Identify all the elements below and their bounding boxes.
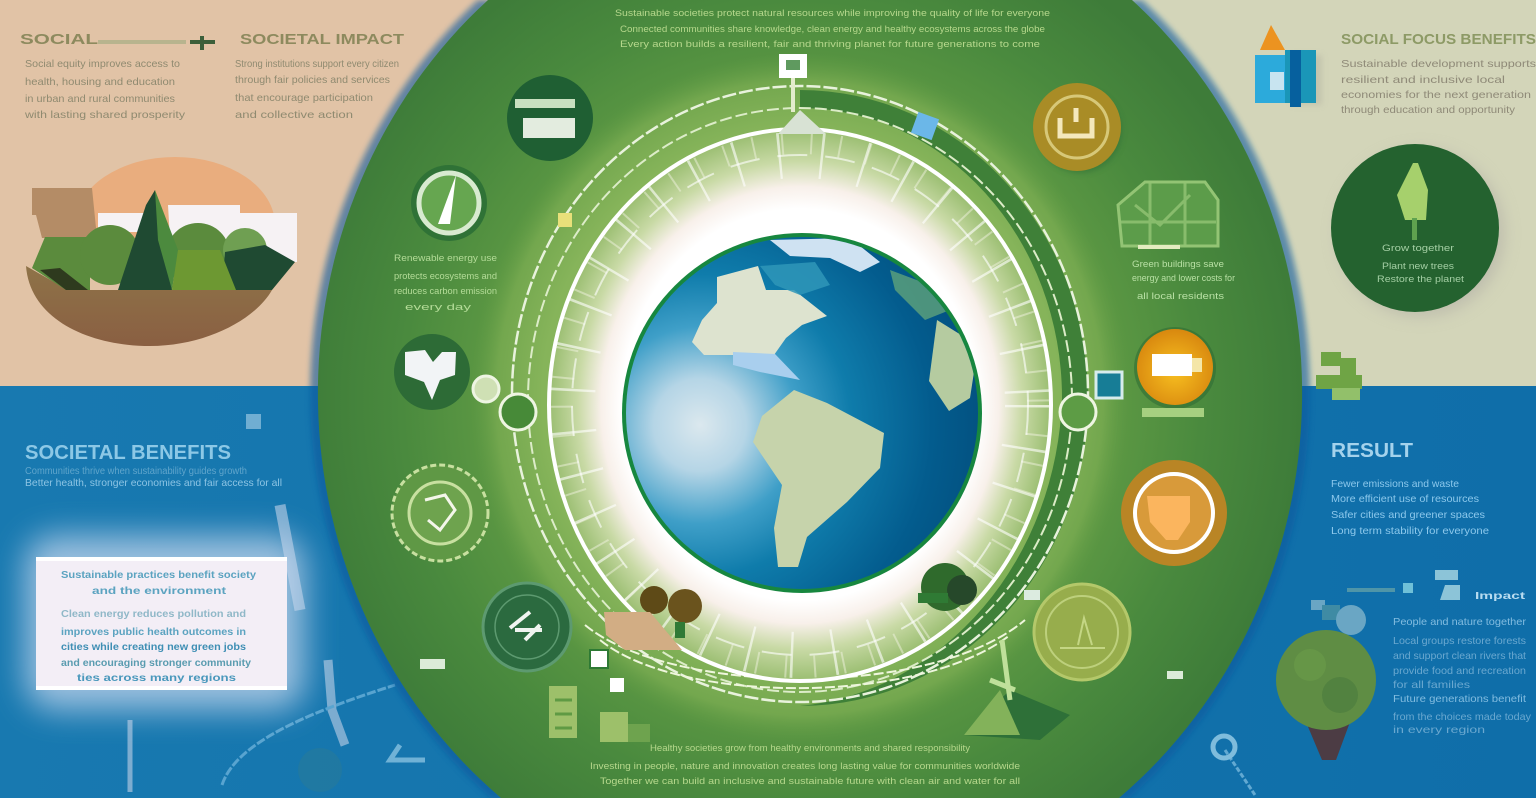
- plant: [1397, 163, 1428, 220]
- icon: recycling badge: [411, 165, 487, 241]
- body text: economies for the next generation: [1341, 89, 1531, 101]
- bottom centre text: Healthy societies grow from healthy environments and shared responsibility: [650, 743, 970, 754]
- icon: olive landscape badge: [1034, 584, 1130, 680]
- body text: health, housing and education: [25, 76, 175, 88]
- outer thin ring: [512, 86, 1088, 702]
- heading: SOCIETAL BENEFITS: [25, 442, 231, 464]
- dark shrubs left: [40, 268, 88, 290]
- arrow: [98, 36, 215, 50]
- body text: and collective action: [235, 109, 353, 121]
- arctic ice: [770, 238, 880, 272]
- body text: [1341, 58, 1536, 116]
- small chart label: Impact: [1475, 591, 1526, 602]
- body text: through fair policies and services: [235, 74, 390, 86]
- body text: with lasting shared prosperity: [24, 109, 186, 121]
- panel: societal benefits left: [25, 414, 282, 489]
- icon: magnifier node: [1213, 736, 1235, 758]
- white clouds: [98, 205, 297, 262]
- dark band: [800, 90, 1088, 706]
- bottom centre text: Together we can build an inclusive and sustainable future with clean air and water for all: [600, 776, 1020, 787]
- body text: [1331, 478, 1489, 537]
- top centre text: Every action builds a resilient, fair and thriving planet for future generations to come: [620, 39, 1040, 50]
- icon: cloud shape above tree: [1311, 600, 1366, 635]
- badge text: Grow together: [1382, 243, 1454, 254]
- card text: Sustainable practices benefit society: [61, 570, 256, 581]
- small marker: [246, 414, 261, 429]
- body text: that encourage participation: [235, 92, 373, 104]
- card text: Clean energy reduces pollution and: [61, 609, 246, 620]
- left text block: upper: every day: [405, 302, 471, 313]
- body text: [24, 58, 186, 121]
- africa: [929, 320, 974, 411]
- band segments: [572, 155, 1028, 655]
- right text block: upper: Green buildings save: [1132, 259, 1224, 270]
- card text: and the environment: [92, 586, 227, 597]
- small chart label: [1347, 570, 1526, 602]
- blue diamond node: [911, 112, 939, 140]
- background: blue panel: [0, 386, 1536, 798]
- right lower text: for all families: [1393, 679, 1470, 691]
- body text: Sustainable development supports: [1341, 58, 1536, 70]
- badge text: [1377, 243, 1464, 285]
- callout card: [25, 535, 305, 710]
- subtitle: Communities thrive when sustainability guides growth: [25, 466, 247, 477]
- card text: and encouraging stronger community: [61, 658, 251, 669]
- icon: outlined globe badge: [392, 465, 488, 561]
- background: peach panel: [0, 0, 800, 388]
- icon: orange cup badge: [1134, 327, 1216, 417]
- right lower text: [1393, 616, 1532, 736]
- icon: dark green document badge: [507, 75, 593, 161]
- heading: RESULT: [1331, 440, 1413, 462]
- left ring node: [473, 376, 536, 430]
- icon: blue box with flame: [1255, 25, 1322, 107]
- icon: dark teal arrow badge: [483, 583, 571, 671]
- north america: [692, 266, 827, 355]
- sprout: [675, 622, 685, 638]
- lower arcs: [585, 620, 1025, 688]
- panel: right blue text: [1331, 440, 1489, 537]
- bottom centre text: [590, 743, 1020, 787]
- heading: SOCIAL FOCUS BENEFITS: [1341, 31, 1536, 48]
- right lower text: and support clean rivers that: [1393, 650, 1526, 662]
- right lower text: Local groups restore forests: [1393, 635, 1526, 647]
- tree blobs: [32, 223, 267, 290]
- body text: More efficient use of resources: [1331, 493, 1479, 505]
- second thin ring: [528, 108, 1072, 692]
- light band with white halo: [549, 129, 1051, 681]
- right lower text: People and nature together: [1393, 616, 1527, 628]
- body text: [235, 58, 399, 121]
- right lower text: provide food and recreation: [1393, 665, 1526, 677]
- right ring node: [1060, 372, 1122, 430]
- central green disc: [318, 0, 1302, 798]
- icon: tree: [1276, 630, 1376, 760]
- band lattice: [562, 143, 1038, 667]
- teal arctic islands: [760, 262, 830, 295]
- body text: Long term stability for everyone: [1331, 525, 1489, 537]
- subtitle line two: Better health, stronger economies and fair access for all: [25, 477, 282, 489]
- light conifer side: [155, 190, 178, 290]
- panel: top left social text: [20, 31, 215, 121]
- top centre text: Connected communities share knowledge, clean energy and healthy ecosystems across the globe: [620, 24, 1045, 35]
- node icon: [779, 54, 807, 78]
- central america shallow water: [733, 352, 800, 380]
- heading: SOCIETAL IMPACT: [240, 31, 404, 48]
- right text block: upper: all local residents: [1137, 291, 1224, 302]
- left text block: upper: Renewable energy use: [394, 253, 497, 264]
- outer light band: [470, 53, 1130, 743]
- left text block: upper: [394, 253, 497, 313]
- badge text: Plant new trees: [1382, 261, 1454, 272]
- dark conifers: [118, 190, 295, 290]
- continents: [692, 238, 974, 567]
- illustration: forest landscape: [26, 157, 297, 346]
- heading: SOCIAL: [20, 31, 98, 48]
- globe: [622, 233, 982, 593]
- sky dome: [75, 157, 275, 293]
- globe rim: [622, 233, 982, 593]
- icon: large dark green plant badge: [1331, 144, 1504, 316]
- cloud shape: [778, 110, 826, 134]
- card text: cities while creating new green jobs: [61, 642, 246, 653]
- icon: bushes and hand: [604, 586, 702, 650]
- icon: wind turbine and hill: [964, 590, 1070, 740]
- right lower text: from the choices made today: [1393, 711, 1532, 723]
- icon: small label marker right: [1167, 671, 1183, 679]
- left text block: upper: reduces carbon emission: [394, 286, 497, 297]
- mid forest: [172, 250, 236, 290]
- ocean: [626, 237, 978, 589]
- icon: orange shield badge: [1121, 460, 1227, 566]
- top node on ring: [778, 54, 826, 134]
- body text: Social equity improves access to: [25, 58, 180, 70]
- right lower text: in every region: [1393, 724, 1485, 736]
- badge text: Restore the planet: [1377, 274, 1464, 285]
- top centre text: Sustainable societies protect natural resources while improving the quality of life for everyone: [615, 8, 1050, 19]
- icon: dark green bush: [918, 563, 977, 611]
- bottom centre text: Investing in people, nature and innovation creates long lasting value for communities worldwide: [590, 761, 1020, 772]
- south america: [753, 390, 884, 567]
- icon: community badge: [394, 334, 470, 410]
- hand: [604, 612, 682, 650]
- body text: Fewer emissions and waste: [1331, 478, 1459, 490]
- white ring: [549, 129, 1051, 681]
- green disc shadow: [310, 0, 1310, 798]
- brown bushes: [640, 586, 668, 614]
- wind turbines on blue panel: [130, 505, 1255, 795]
- icon: city buildings: [549, 686, 650, 742]
- background: sage panel: [800, 0, 1536, 388]
- top centre text: [615, 8, 1050, 50]
- card text: [61, 570, 256, 684]
- body text: Strong institutions support every citizen: [235, 58, 399, 70]
- right text block: upper: [1132, 259, 1235, 302]
- icon: gold chart badge: [1033, 83, 1122, 173]
- left text block: upper: protects ecosystems and: [394, 271, 497, 282]
- small yellow node: [558, 213, 572, 227]
- body text: in urban and rural communities: [25, 93, 175, 105]
- band inner ring: [572, 155, 1028, 655]
- ground: [26, 266, 272, 346]
- icon: seedling: [1316, 352, 1362, 400]
- icon: small label marker left: [420, 659, 445, 669]
- card text: improves public health outcomes in: [61, 627, 246, 638]
- europe: [890, 270, 950, 320]
- body text: through education and opportunity: [1341, 104, 1516, 116]
- card text: ties across many regions: [77, 673, 237, 684]
- ring system around the globe: [470, 53, 1130, 743]
- small white node lower left: [590, 650, 624, 692]
- brown hill: [32, 188, 97, 238]
- right lower text: Future generations benefit: [1393, 693, 1526, 705]
- body text: Safer cities and greener spaces: [1331, 509, 1485, 521]
- body text: resilient and inclusive local: [1341, 74, 1505, 86]
- icon: green house outline: [1118, 182, 1218, 247]
- panel: top left second column: [235, 31, 404, 121]
- right text block: upper: energy and lower costs for: [1132, 273, 1235, 284]
- card: [36, 557, 287, 690]
- glow: [25, 535, 305, 710]
- panel: top right text: [1255, 25, 1536, 116]
